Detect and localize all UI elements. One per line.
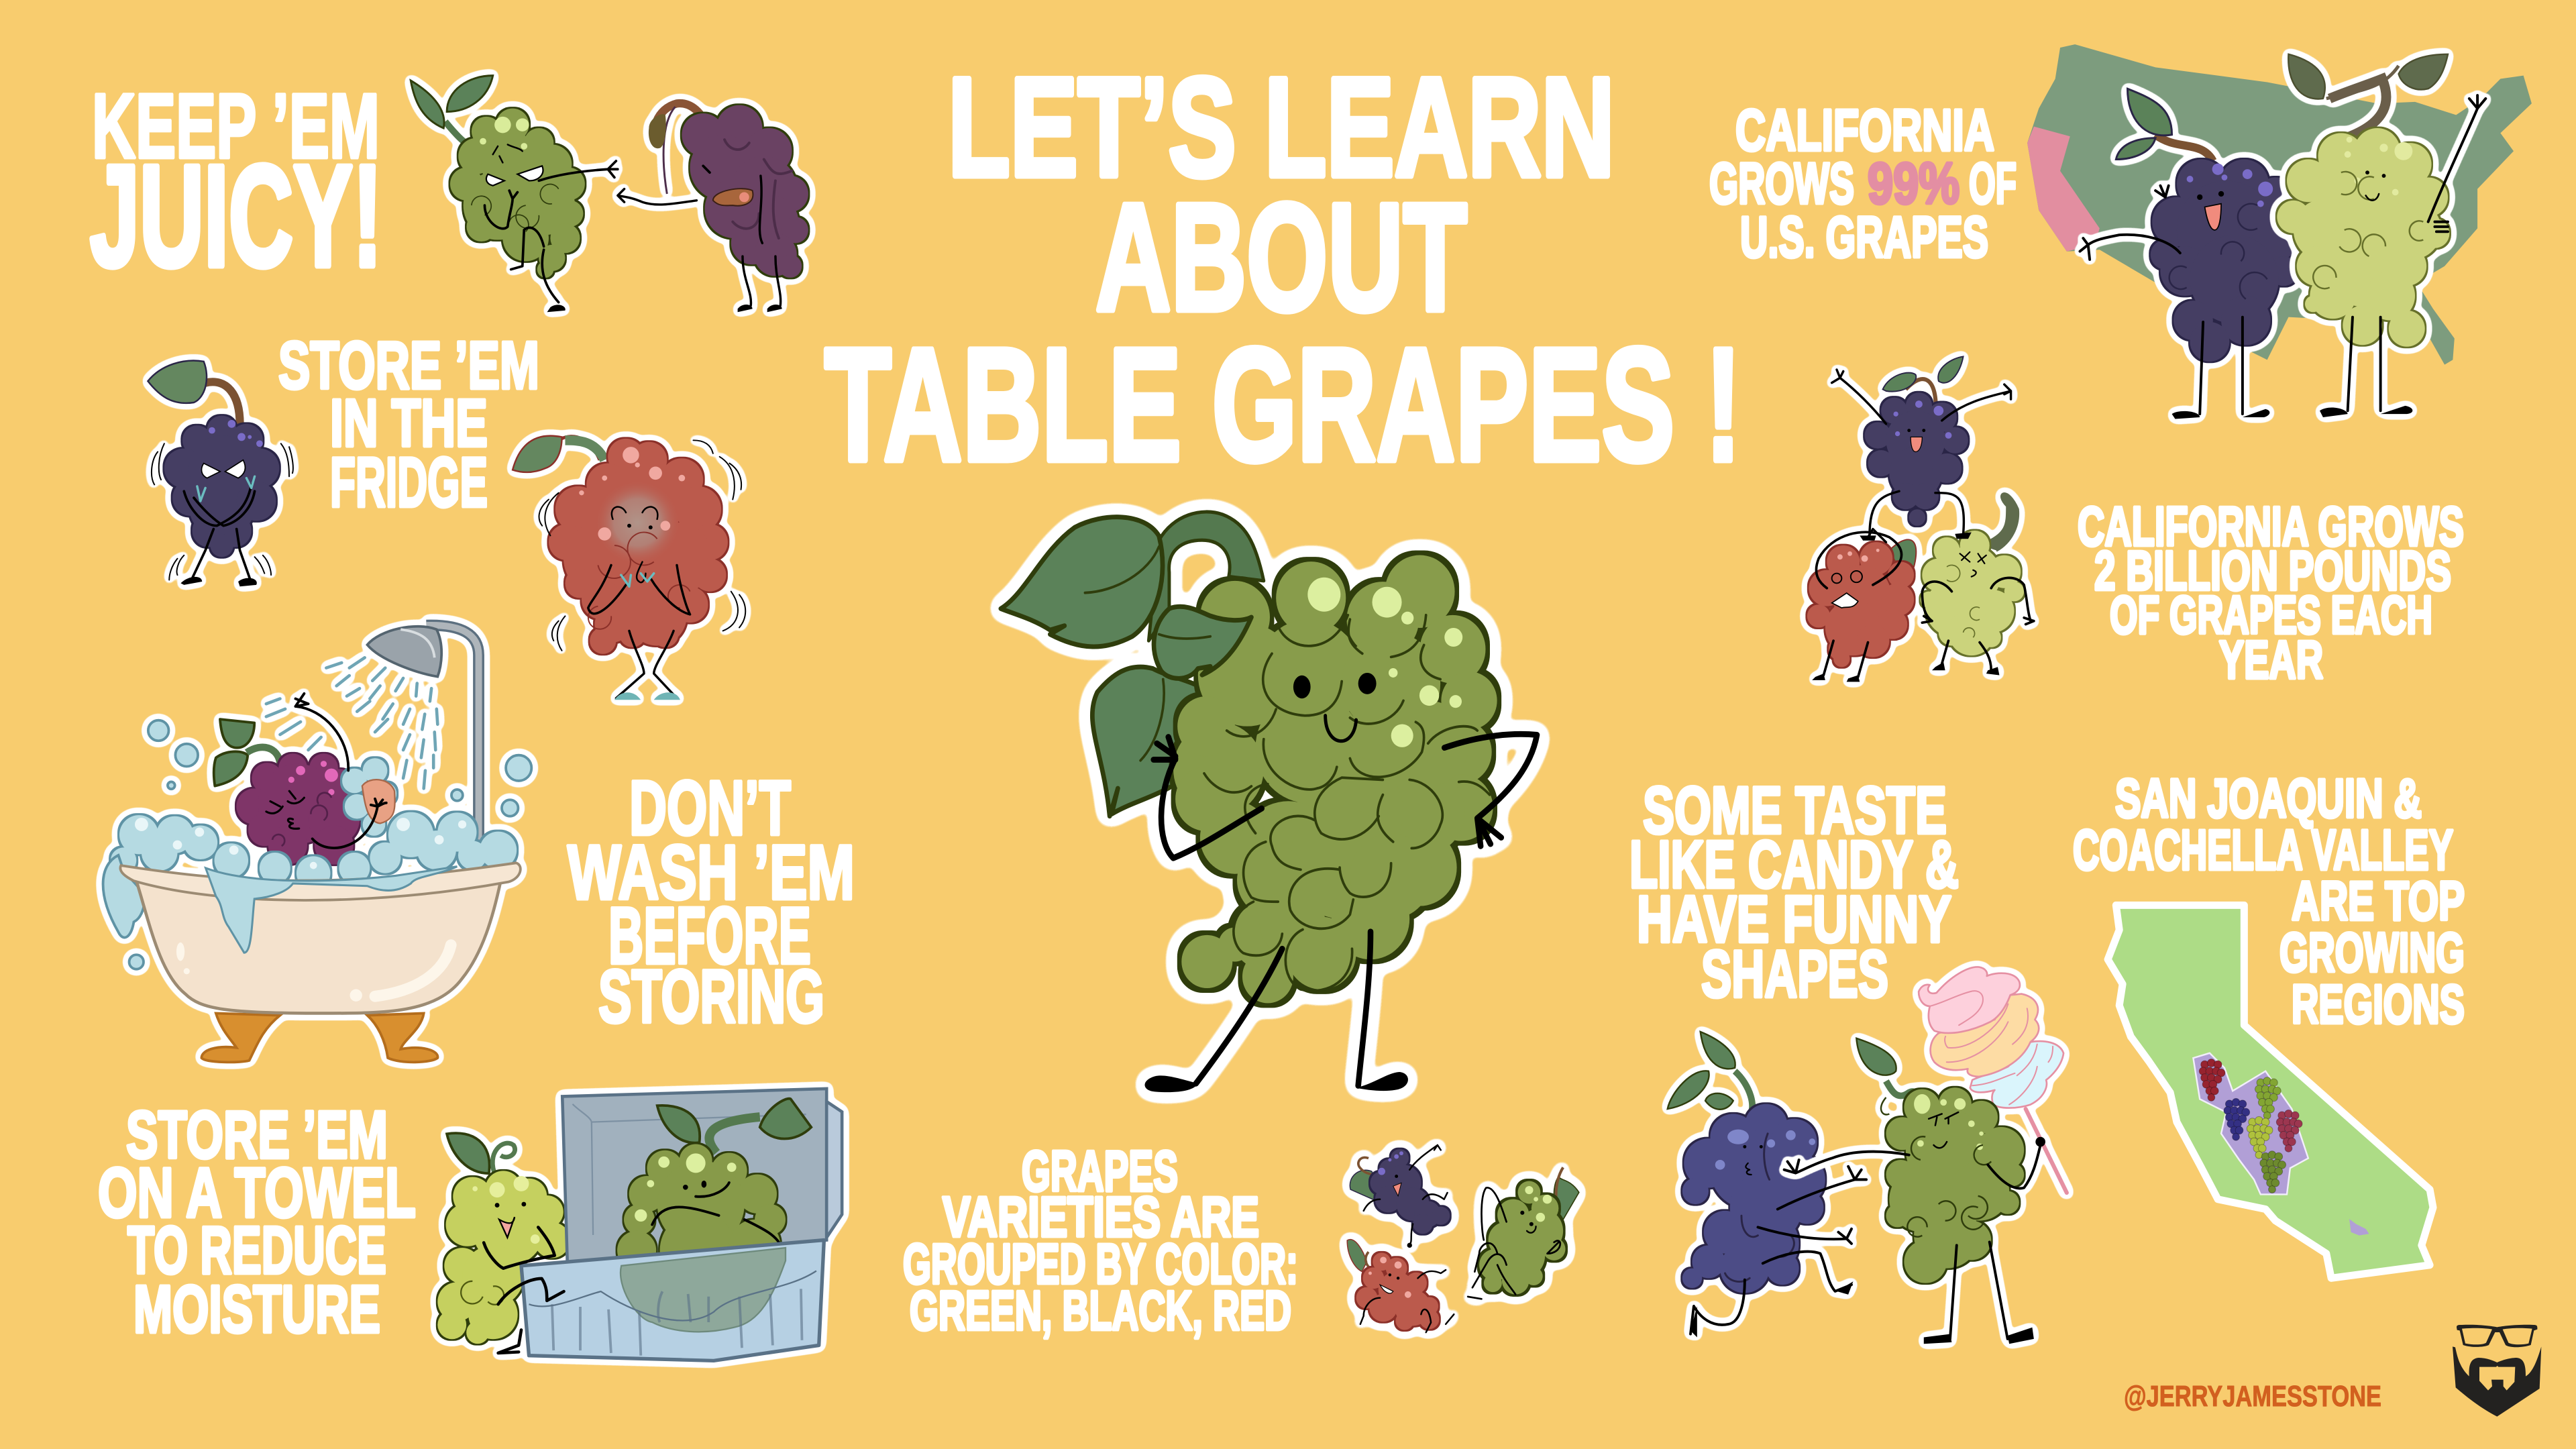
heading: san joaquin and coachella valley: GROWING xyxy=(2279,921,2465,983)
heading: california grows 99% of u.s. grapes: CALIFORNIA xyxy=(1735,98,1994,163)
tub highlights xyxy=(176,943,362,1002)
heading: store 'em on a towel xyxy=(98,1097,416,1347)
tub rim xyxy=(120,863,521,900)
heading: california grows 99% of u.s. grapes: U.S. GRAPES xyxy=(1740,205,1988,270)
icon: dancing blue grape xyxy=(1668,1032,1866,1337)
icon: grape in bubble bath with shower xyxy=(103,625,531,1062)
panel: california grows 99% xyxy=(1709,44,2532,419)
shower pipe and head xyxy=(368,625,479,863)
heading: don't wash 'em before storing: WASH ’EM xyxy=(568,830,855,916)
red grape xyxy=(1807,529,1916,682)
icon: main green grape mascot xyxy=(1001,512,1537,1092)
heading: some taste like candy: SHAPES xyxy=(1701,936,1888,1011)
panel: grapes grouped by color xyxy=(903,1140,1579,1342)
panel: candy taste and funny shapes xyxy=(1629,773,2067,1344)
icon: shivering red grape xyxy=(513,436,745,700)
panel: store on a towel xyxy=(98,1089,842,1360)
tub body xyxy=(136,881,500,1013)
heading: keep 'em juicy xyxy=(90,75,382,297)
icon: lime grape and grape in plastic box xyxy=(437,1089,842,1360)
heading: california grows 99% of u.s. grapes: 99% xyxy=(1868,152,1960,216)
heading: don't wash 'em before storing: BEFORE xyxy=(608,891,811,981)
heading: some taste like candy: LIKE CANDY & xyxy=(1629,827,1959,902)
heading: california grows 99% of u.s. grapes: GROWS xyxy=(1709,152,1854,216)
icon: shivering purple grape xyxy=(148,361,293,586)
icon: scared green grape xyxy=(411,76,618,312)
bathing grape xyxy=(236,753,360,865)
icon: lime grape waving xyxy=(2277,54,2485,417)
title xyxy=(824,48,1741,494)
heading: 2 billion pounds: YEAR xyxy=(2219,630,2323,690)
title: LET’S LEARN xyxy=(948,48,1615,206)
panel: don't wash before storing xyxy=(103,625,855,1062)
heading: store 'em in the fridge: IN THE xyxy=(330,386,488,461)
icon: tumbling purple grape xyxy=(1350,1145,1450,1248)
heading: san joaquin and coachella valley: ARE TOP xyxy=(2292,871,2465,932)
sponge xyxy=(362,780,395,823)
panel: growing regions xyxy=(2073,768,2465,1278)
heading: store 'em in the fridge: STORE ’EM xyxy=(278,328,539,403)
icon: bearded face logo xyxy=(2453,1325,2541,1417)
box bottom xyxy=(521,1240,824,1360)
icon: cotton candy and green grape xyxy=(1784,967,2067,1344)
heading: don't wash 'em before storing xyxy=(568,765,855,1038)
heading: don't wash 'em before storing: STORING xyxy=(598,955,824,1038)
heading: store 'em on a towel: MOISTURE xyxy=(133,1272,380,1347)
heading: varieties grouped by color: VARIETIES ARE xyxy=(943,1185,1259,1248)
heading: 2 billion pounds xyxy=(2078,495,2464,690)
title: TABLE GRAPES ! xyxy=(824,315,1741,494)
lime grape xyxy=(437,1133,570,1344)
panel: store 'em in the fridge xyxy=(148,328,745,700)
foam xyxy=(111,758,517,890)
map: united states xyxy=(2027,44,2532,365)
heading: store 'em on a towel: TO REDUCE xyxy=(127,1213,386,1288)
map: coachella region xyxy=(2349,1219,2369,1236)
heading: california grows 99% of u.s. grapes: OF xyxy=(1969,152,2017,216)
heading: store 'em on a towel: STORE ’EM xyxy=(126,1097,388,1173)
heading: store 'em in the fridge: FRIDGE xyxy=(330,443,488,522)
heading: california grows 99% of u.s. grapes xyxy=(1709,98,2017,270)
heading: some taste like candy xyxy=(1629,773,1959,1011)
heading: varieties grouped by color: GREEN, BLACK, RED xyxy=(910,1279,1291,1342)
box lid xyxy=(562,1089,826,1266)
purple grape on top xyxy=(1832,356,2011,541)
cotton candy stick xyxy=(2026,1109,2067,1193)
heading: store 'em on a towel: ON A TOWEL xyxy=(98,1154,416,1232)
icon: tumbling red grape xyxy=(1347,1240,1454,1332)
bubbles xyxy=(129,720,531,969)
map: california highlighted xyxy=(2027,127,2100,252)
heading: keep 'em juicy: JUICY! xyxy=(90,135,382,297)
cotton candy xyxy=(1919,967,2063,1108)
grape in box xyxy=(617,1099,811,1289)
shower water drops xyxy=(266,657,437,788)
credit handle: @JERRYJAMESSTONE xyxy=(2124,1380,2381,1413)
mini grape bunches xyxy=(2199,1059,2302,1193)
left suds drip xyxy=(103,855,147,938)
heading: varieties grouped by color: GRAPES xyxy=(1022,1140,1178,1203)
icon: purple grape waving xyxy=(2080,89,2298,419)
map: central valley region xyxy=(2193,1053,2308,1194)
leaves xyxy=(214,719,280,786)
lime grape xyxy=(1921,494,2034,676)
heading: don't wash 'em before storing: DON’T xyxy=(629,765,791,851)
heading: varieties grouped by color xyxy=(903,1140,1298,1342)
title: ABOUT xyxy=(1095,172,1467,343)
heading: varieties grouped by color: GROUPED BY COLOR: xyxy=(903,1232,1298,1295)
heading: san joaquin and coachella valley xyxy=(2073,768,2465,1035)
panel: keep 'em juicy xyxy=(90,75,808,312)
heading: san joaquin and coachella valley: SAN JOAQUIN & xyxy=(2115,768,2422,829)
icon: tumbling green grape xyxy=(1468,1167,1579,1299)
heading: keep 'em juicy: KEEP ’EM xyxy=(92,75,380,178)
heading: some taste like candy: SOME TASTE xyxy=(1643,773,1947,847)
heading: store 'em in the fridge xyxy=(278,328,539,522)
icon: stacked grape trio xyxy=(1807,356,2034,682)
heading: some taste like candy: HAVE FUNNY xyxy=(1637,882,1951,956)
icon: shriveled raisin grape xyxy=(618,103,808,312)
map: california xyxy=(2108,905,2433,1278)
spilled water xyxy=(206,867,457,953)
panel: california grows 2 billion pounds xyxy=(1807,356,2464,690)
heading: san joaquin and coachella valley: REGIONS xyxy=(2292,974,2465,1035)
claw feet xyxy=(201,1013,437,1062)
